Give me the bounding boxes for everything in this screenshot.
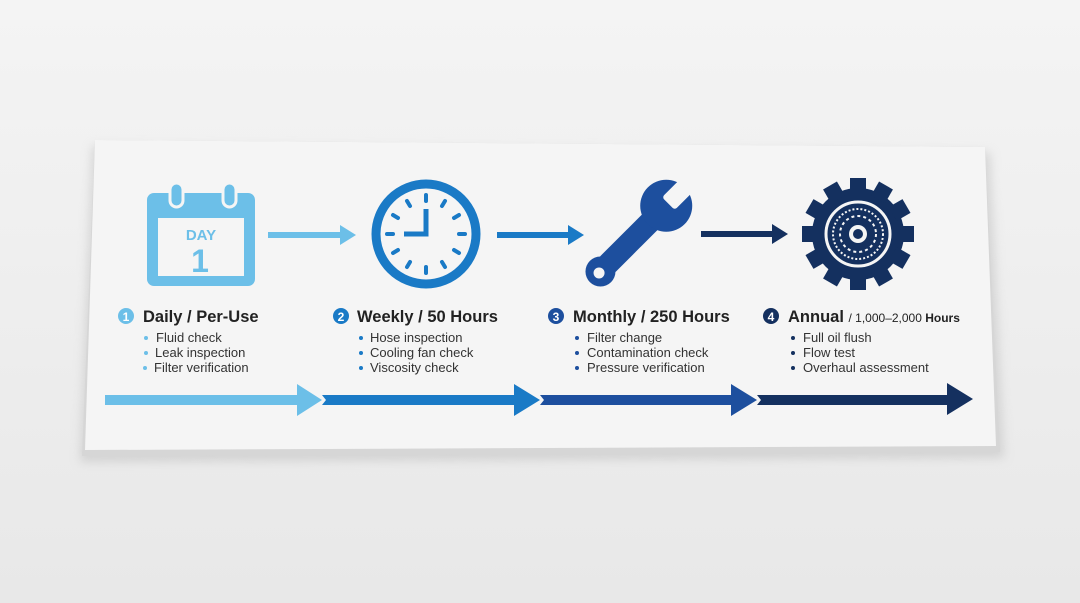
step 4 text: Flow test [803,345,855,360]
step 1 text: Fluid check [156,330,222,345]
step 3 text: Pressure verification [587,360,705,375]
step 3 text: Filter change [587,330,662,345]
step 1 text: Leak inspection [155,345,245,360]
step 4 text: Annual / 1,000–2,000 Hours [788,308,960,326]
icon: calendar: DAY [186,227,216,244]
step 4 text: Overhaul assessment [803,360,929,375]
step 3 text: 3 [553,310,560,324]
step 4 text [763,308,960,375]
step 3 text: Monthly / 250 Hours [573,308,730,326]
step 4 text: Full oil flush [803,330,872,345]
step 1 text: Daily / Per-Use [143,308,259,326]
arrow: calendar to clock [268,225,356,245]
arrow: clock to wrench [497,225,584,245]
step 2 text: Hose inspection [370,330,462,345]
step 2 text: Viscosity check [370,360,459,375]
icon: gear [802,178,914,290]
icon: wrench [571,167,705,301]
step 1 text: 1 [123,310,130,324]
icon: calendar [147,183,255,286]
step 2 text: 2 [338,310,345,324]
step 4 text: 4 [768,310,775,324]
icon: calendar: 1 [191,243,209,279]
board [80,140,1004,462]
step 1 text [118,308,259,375]
step 3 text [548,308,730,375]
icon: clock [376,184,476,284]
step 2 text: Cooling fan check [370,345,474,360]
arrow: wrench to gear [701,224,788,244]
step 2 text: Weekly / 50 Hours [357,308,498,326]
step 1 text: Filter verification [154,360,249,375]
step 2 text [333,308,498,375]
timeline arrows [105,383,973,416]
step 3 text: Contamination check [587,345,709,360]
